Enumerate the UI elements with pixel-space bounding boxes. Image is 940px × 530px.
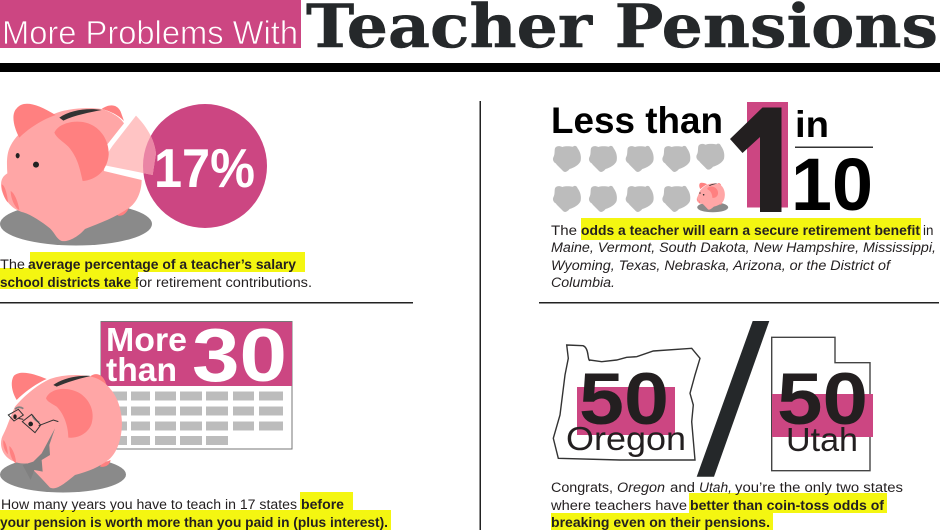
calendar heading text [106, 313, 287, 397]
text: highlights [0, 492, 391, 530]
text: salary caption [0, 257, 312, 290]
panel: less than 1 in 10 [551, 100, 936, 290]
text: in: in [795, 104, 829, 145]
text: 10: 10 [791, 143, 873, 226]
panel: 17 percent [0, 104, 312, 290]
map: utah [772, 337, 873, 471]
beard [23, 428, 55, 480]
map: oregon [553, 345, 700, 460]
heading: more problems with: More Problems With [2, 14, 298, 51]
icon: pig shadow [0, 202, 152, 246]
divider left [0, 302, 413, 304]
icon: pie wedge [100, 116, 156, 175]
label utah: Utah [786, 421, 858, 458]
eyes [13, 414, 33, 426]
text: break-even caption: you’re the only two states [735, 480, 903, 495]
statistic: 17 percent: 17% [154, 137, 255, 199]
text: break-even caption: better than coin-toss odds of [690, 498, 885, 513]
text: highlights [0, 252, 305, 289]
wedge overlap [143, 136, 156, 175]
slash [697, 321, 769, 477]
calendar heading text: More [106, 321, 187, 358]
glasses [8, 409, 58, 433]
divider right [539, 302, 939, 304]
text: years caption: before [301, 497, 344, 512]
text: years caption [0, 497, 388, 530]
text: break-even caption: where teachers have [550, 498, 687, 513]
text: break-even caption [550, 480, 903, 530]
number oregon: 50 [579, 359, 669, 440]
fraction line [795, 146, 873, 148]
text: odds caption: in [923, 223, 933, 238]
number utah: 50 [777, 359, 868, 440]
header rule [0, 63, 940, 72]
text: salary caption: for retirement contributions. [135, 275, 312, 290]
statistic circle [143, 104, 267, 228]
text: break-even caption: and [670, 480, 695, 495]
text: odds caption [551, 223, 936, 290]
calendar heading text: 30 [192, 313, 287, 397]
text: odds caption: Wyoming, Texas, Nebraska, Arizona, or the District of [551, 258, 891, 273]
calendar heading text: than [106, 351, 177, 388]
big numeral 1 [730, 108, 782, 212]
eyebrows [15, 407, 39, 422]
text: break-even caption: breaking even on their pensions. [551, 515, 770, 530]
text: highlight [581, 218, 921, 240]
heading: less than: Less than [551, 100, 723, 141]
text: break-even caption: Utah, [699, 480, 732, 495]
icon: tiny pink pig [697, 183, 728, 212]
text: highlights [551, 493, 887, 530]
text: break-even caption: Oregon [617, 480, 665, 495]
text: break-even caption: Congrats, [551, 480, 613, 495]
pink band utah [772, 394, 873, 437]
icon: gray pigs [553, 144, 724, 212]
panel: more than 30 [0, 313, 391, 530]
panel: oregon and utah [550, 321, 903, 530]
icon: pig shadow [0, 456, 126, 492]
pink bar [747, 102, 788, 208]
divider center [480, 101, 481, 530]
calendar [101, 313, 292, 449]
text: odds caption: Maine, Vermont, South Dakota, New Hampshire, Mississippi, [551, 240, 936, 255]
text: years caption: your pension is worth more than you paid in (plus interest). [0, 515, 388, 530]
text: odds caption: odds a teacher will earn a secure retirement benefit [581, 223, 921, 238]
text: salary caption: school districts take [0, 275, 131, 290]
label oregon: Oregon [566, 420, 686, 457]
text: years caption: How many years you have to teach in 17 states [1, 497, 297, 512]
pink band oregon [577, 387, 675, 435]
text: salary caption: The [0, 257, 25, 272]
text: salary caption: average percentage of a teacher’s salary [28, 257, 297, 272]
calendar cells [105, 392, 283, 445]
icon: old piggy bank [1, 373, 122, 488]
text: odds caption: The [551, 223, 577, 238]
text: odds caption: Columbia. [551, 275, 615, 290]
icon: piggy bank [1, 104, 142, 241]
